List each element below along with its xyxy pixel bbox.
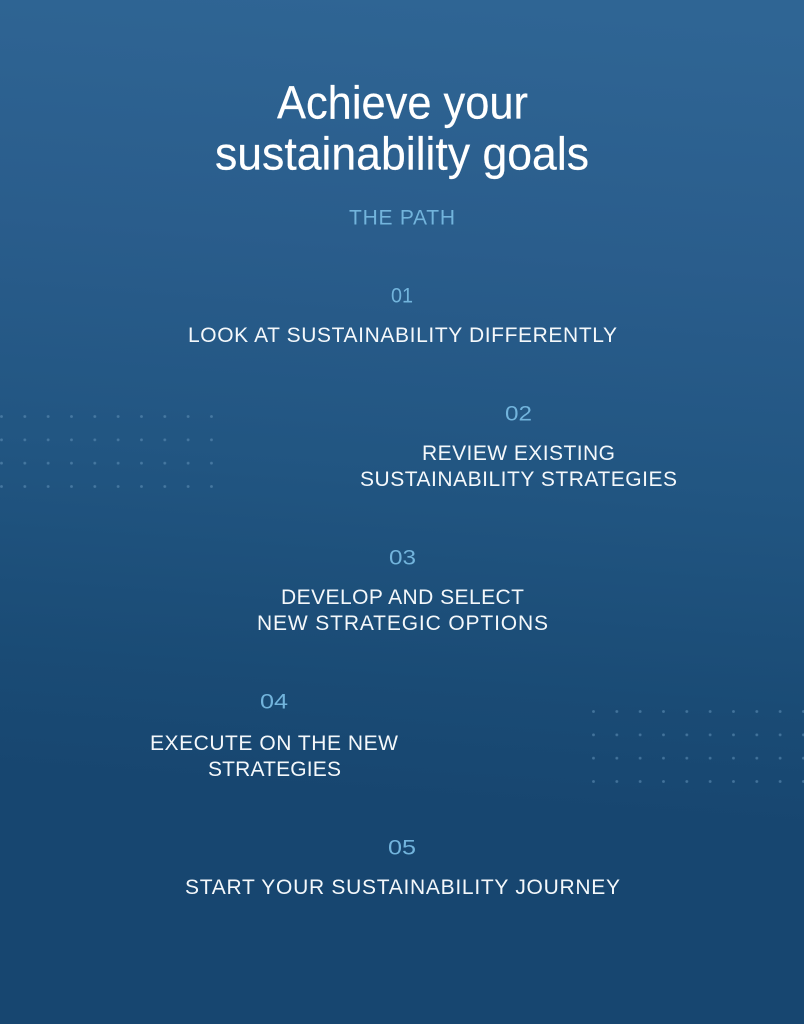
step label 01: LOOK AT SUSTAINABILITY DIFFERENTLY <box>188 324 617 347</box>
title: Achieve your <box>277 76 528 128</box>
step label 03: DEVELOP AND SELECT <box>281 586 524 609</box>
step label 02: SUSTAINABILITY STRATEGIES <box>360 468 677 491</box>
step label 02 <box>360 442 677 491</box>
dot grid left <box>0 415 213 489</box>
step label 03 <box>257 586 548 635</box>
step label 02: REVIEW EXISTING <box>422 442 615 465</box>
step 01 <box>188 284 617 347</box>
title: sustainability goals <box>215 128 589 180</box>
step 05 <box>185 836 620 899</box>
step number 02: 02 <box>505 402 532 426</box>
dot grid right <box>592 710 804 784</box>
step number 03: 03 <box>389 546 416 570</box>
step 03 <box>257 546 548 635</box>
step label 03: NEW STRATEGIC OPTIONS <box>257 612 548 635</box>
title <box>215 76 589 180</box>
subtitle: the path: THE PATH <box>349 206 455 230</box>
step label 04: EXECUTE ON THE NEW <box>150 732 398 755</box>
step number 04: 04 <box>260 690 288 714</box>
step label 04: STRATEGIES <box>208 758 341 781</box>
step 04 <box>150 690 398 781</box>
step number 01: 01 <box>391 284 413 308</box>
step 02 <box>360 402 677 491</box>
step label 05: START YOUR SUSTAINABILITY JOURNEY <box>185 876 620 899</box>
step label 04 <box>150 732 398 781</box>
step number 05: 05 <box>388 836 416 860</box>
